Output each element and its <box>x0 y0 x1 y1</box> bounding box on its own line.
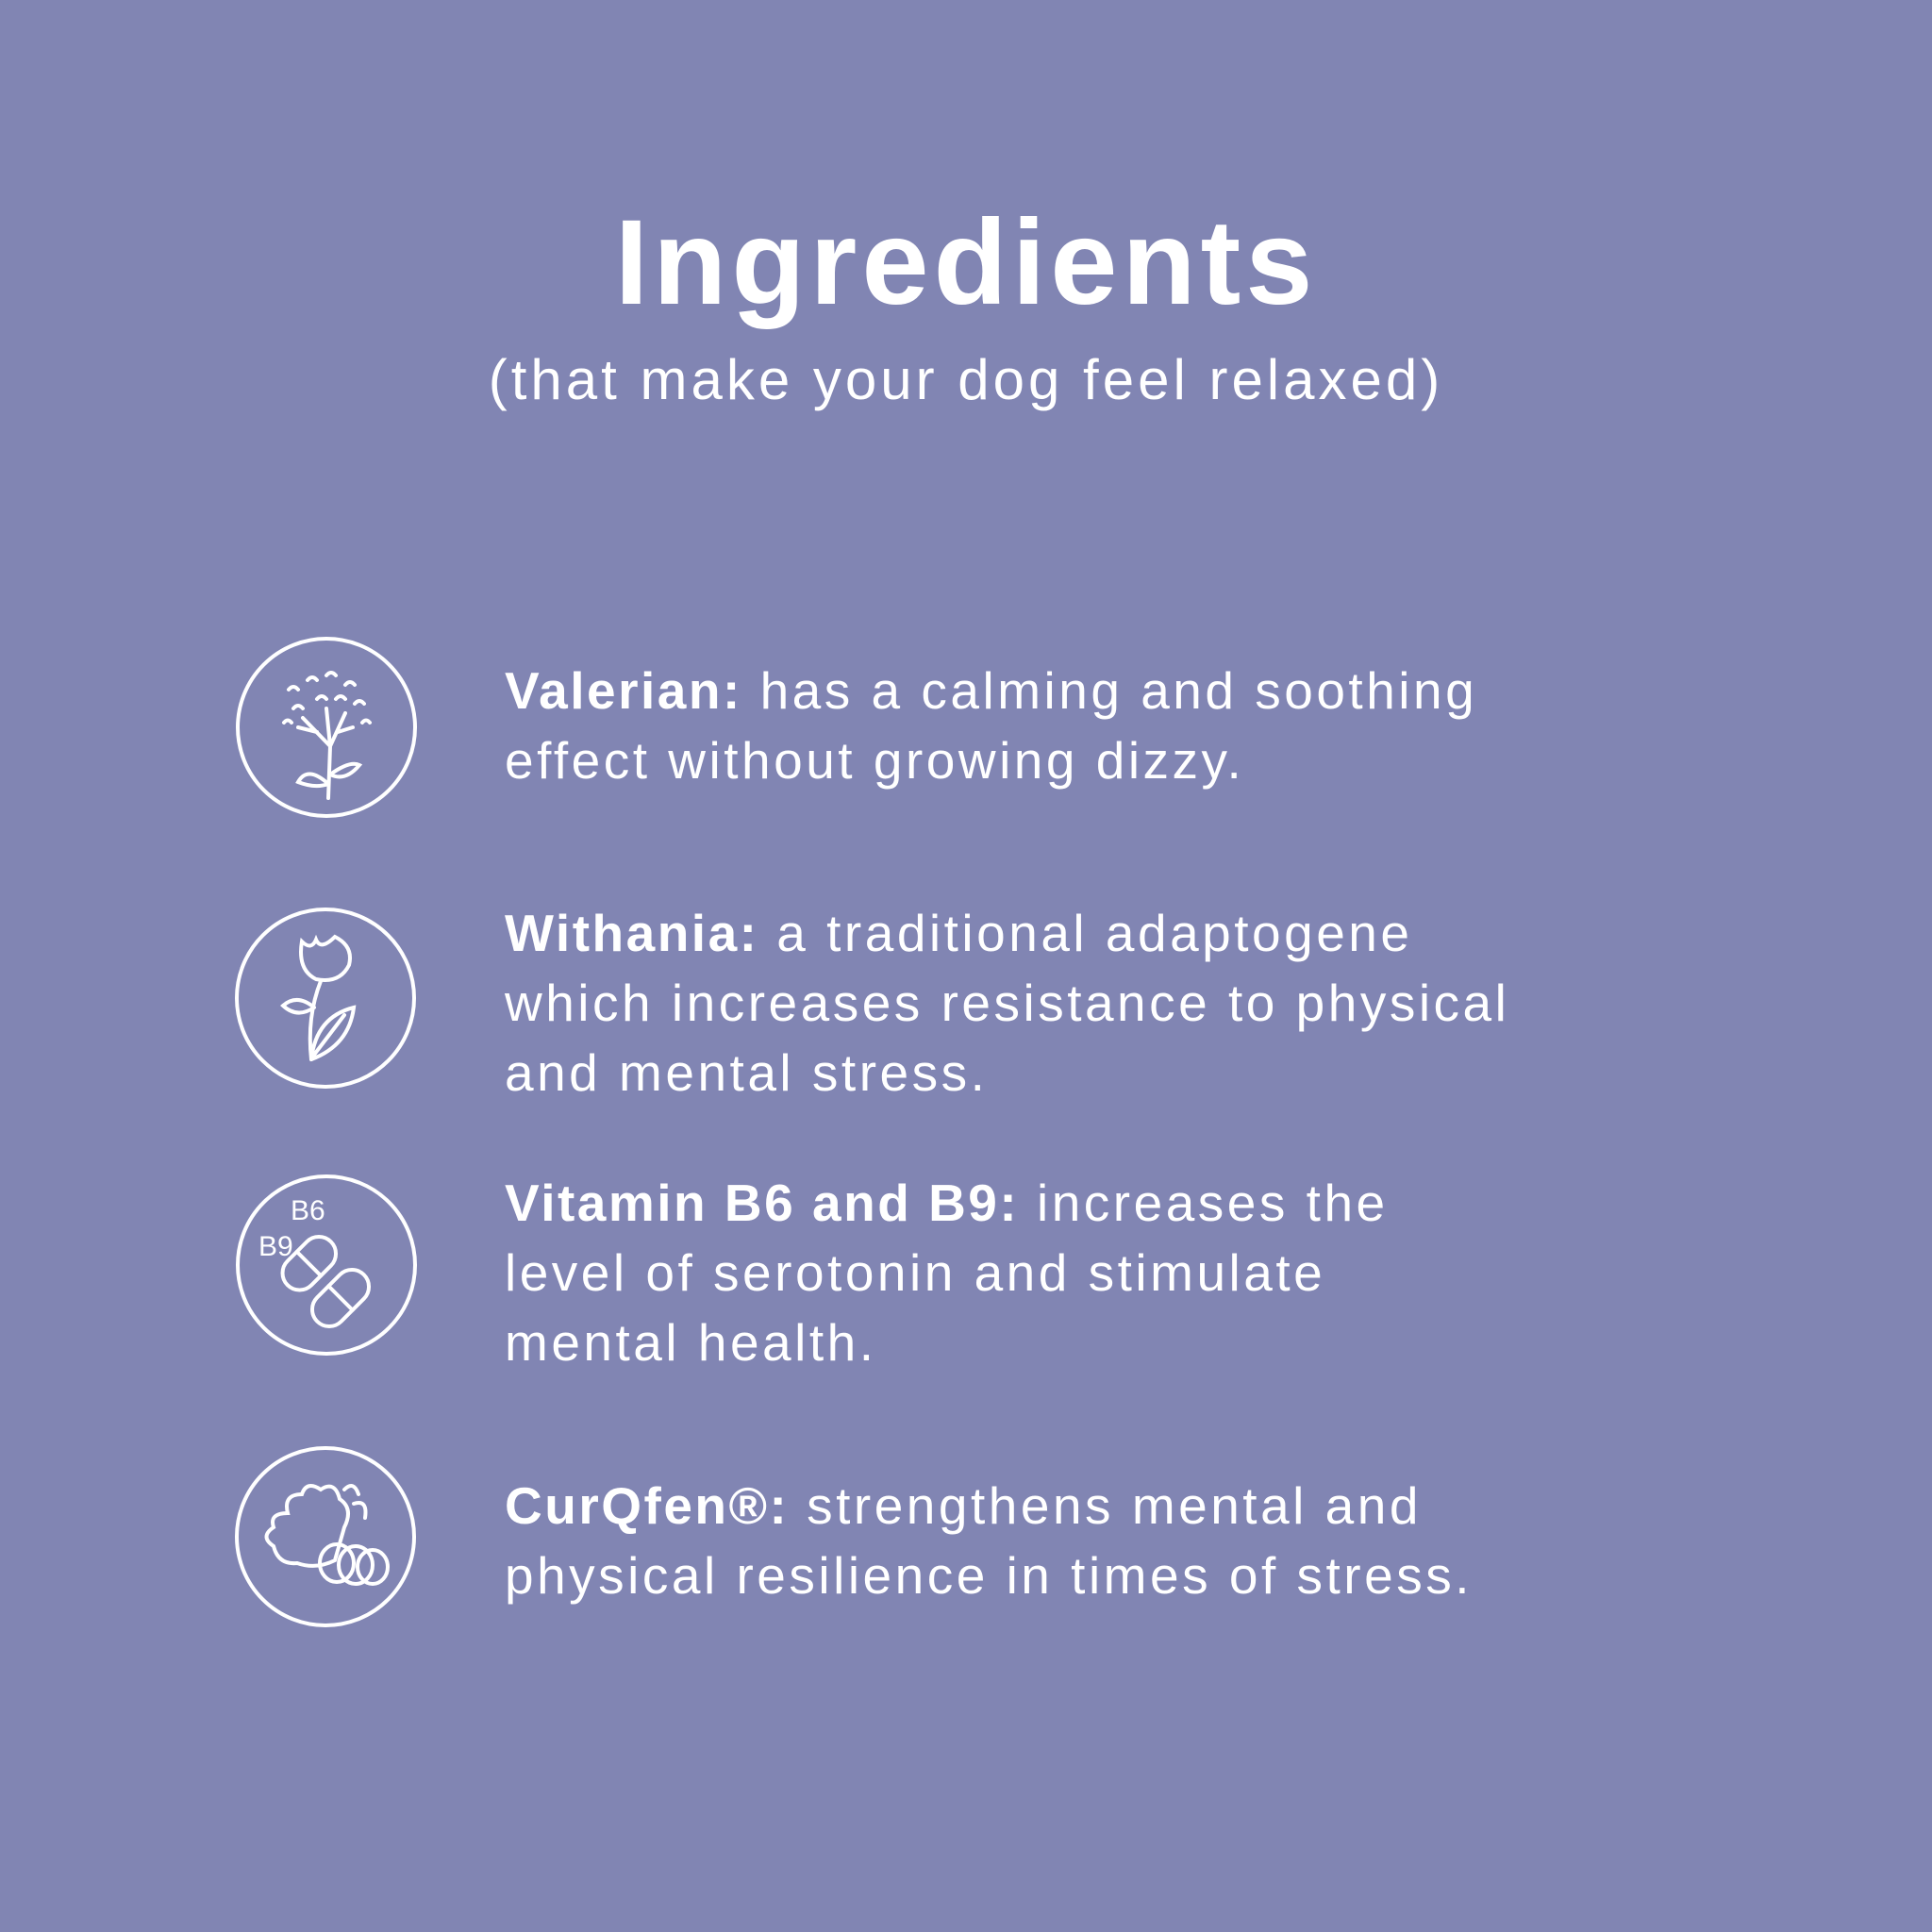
icon: curcuma root <box>235 1446 416 1627</box>
text: valerian: effect without growing dizzy. <box>505 731 1244 790</box>
icon: vitamin capsules: B9 <box>258 1231 293 1262</box>
text: vitamin: mental health. <box>505 1313 877 1372</box>
text: withania <box>505 904 1509 1102</box>
text: curqfen: physical resilience in times of stress. <box>505 1546 1473 1605</box>
text: valerian: Valerian: has a calming and soothing <box>505 661 1477 720</box>
text: curqfen <box>505 1476 1473 1605</box>
text: withania: which increases resistance to physical <box>505 974 1509 1032</box>
text: withania: and mental stress. <box>505 1043 988 1102</box>
icon: vitamin capsules: B6 <box>291 1195 325 1226</box>
title: Ingredients <box>615 195 1317 330</box>
text: valerian <box>505 661 1477 790</box>
text: vitamin: Vitamin B6 and B9: increases the <box>505 1174 1389 1232</box>
text: withania: Withania: a traditional adaptogene <box>505 904 1412 962</box>
icon: valerian flower <box>236 637 417 818</box>
text: vitamin <box>505 1174 1389 1372</box>
subtitle: (that make your dog feel relaxed) <box>489 348 1443 411</box>
text: vitamin: level of serotonin and stimulate <box>505 1243 1325 1302</box>
text: curqfen: CurQfen®: strengthens mental and <box>505 1476 1422 1535</box>
icon: vitamin capsules <box>236 1174 417 1356</box>
icon: withania flower <box>235 908 416 1089</box>
